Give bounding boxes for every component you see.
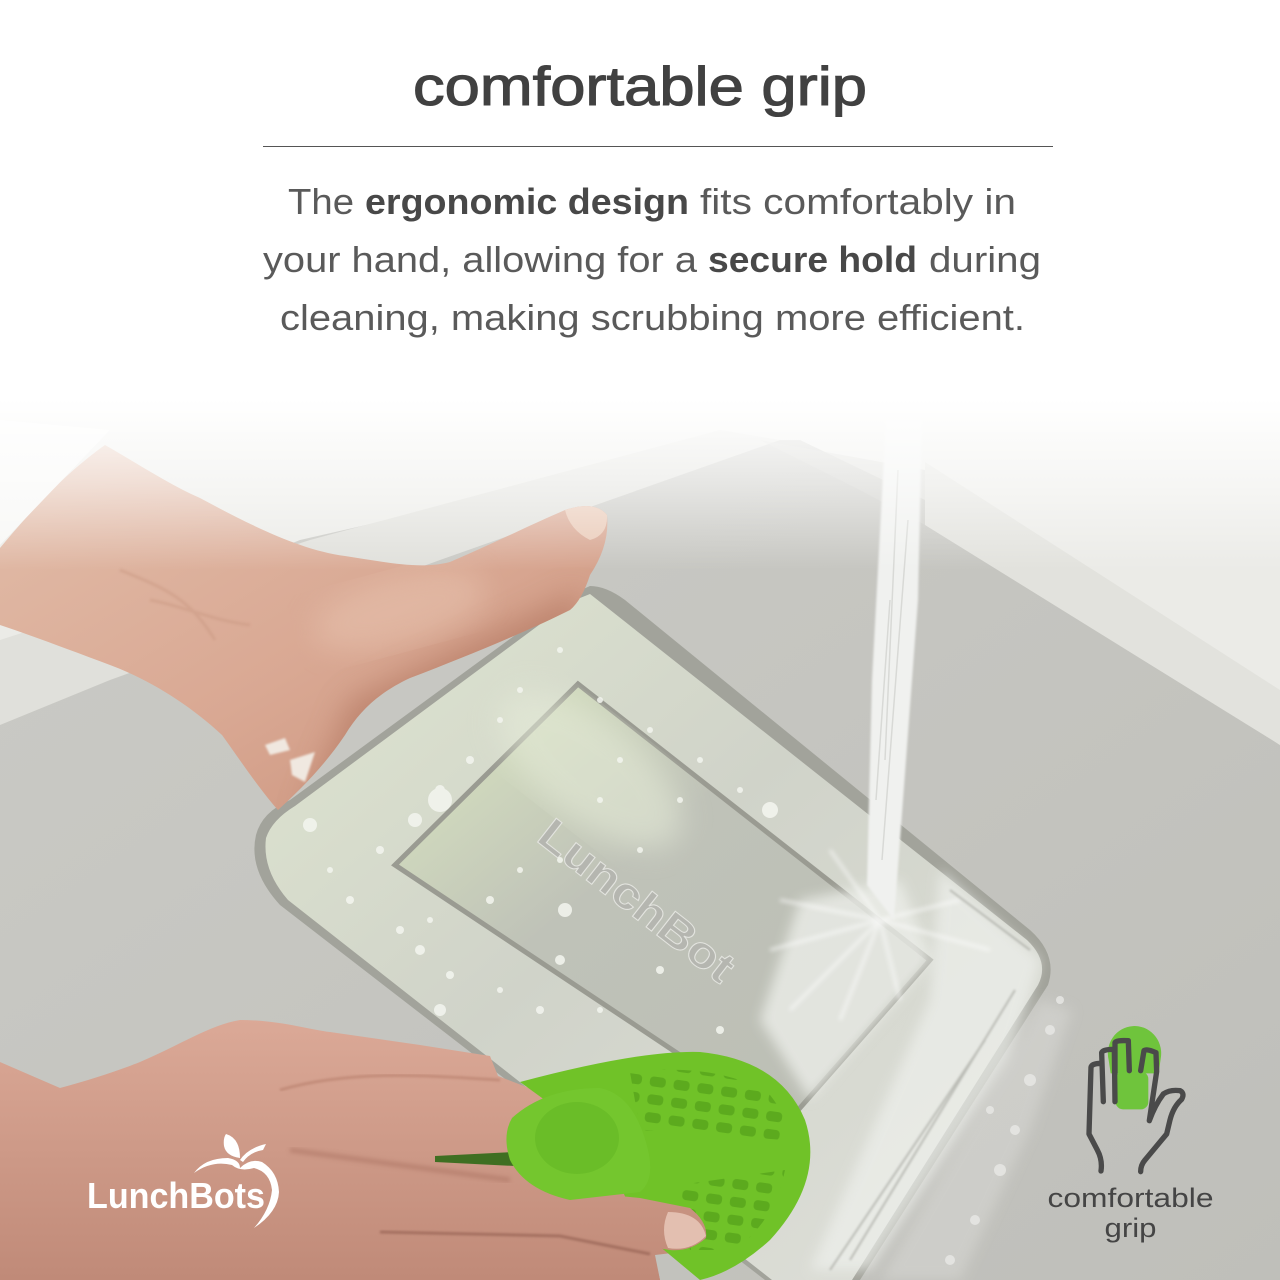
top white fade xyxy=(0,0,1280,570)
description text: secure hold xyxy=(708,239,917,280)
LunchBots logo xyxy=(87,1134,279,1228)
running water stream xyxy=(867,420,922,920)
countertop edges xyxy=(0,380,1280,745)
logo apple outline xyxy=(194,1158,279,1228)
panel reflection xyxy=(473,663,707,877)
lunchbox xyxy=(254,586,1051,1280)
description text: fits comfortably in xyxy=(700,181,1016,222)
title: comfortable grip xyxy=(413,55,867,117)
finger loop xyxy=(506,1088,650,1200)
shadow under thumb xyxy=(308,591,580,780)
description text: The xyxy=(288,181,354,222)
scrubber texture xyxy=(630,1070,786,1140)
photo: hands washing a lunchbox under running water xyxy=(0,440,1280,1280)
splash at water impact xyxy=(760,850,1072,1280)
finger gap xyxy=(380,1232,650,1254)
finger over the pad xyxy=(380,1172,706,1250)
description text: cleaning, making scrubbing more efficient. xyxy=(280,297,1025,338)
logo wordmark: LunchBots xyxy=(87,1175,265,1216)
ring finger xyxy=(350,1238,660,1280)
description text: your hand, allowing for a xyxy=(263,239,698,280)
upper hand xyxy=(0,445,607,820)
rim streaks xyxy=(830,890,1030,1270)
icon: hand with green grip xyxy=(1089,1026,1183,1172)
veins xyxy=(120,570,250,640)
embossed brand on the lid: LunchBot xyxy=(529,809,744,993)
badge label: comfortable xyxy=(1048,1183,1214,1213)
scrubber strip xyxy=(435,1152,515,1166)
palm highlight xyxy=(324,574,480,649)
comfortable grip badge xyxy=(1048,1026,1214,1243)
fingernail xyxy=(664,1212,706,1249)
spray droplets beyond rim xyxy=(945,996,1064,1265)
description text: ergonomic design xyxy=(365,181,689,222)
lunchbox recessed panel xyxy=(395,684,930,1125)
knuckle shadows xyxy=(280,1076,500,1090)
thumbnail xyxy=(565,506,607,540)
sink basin xyxy=(0,380,1280,1280)
foam on palm xyxy=(265,738,315,782)
comfortable grip badge: grip xyxy=(1104,1213,1156,1243)
loop hollow xyxy=(535,1102,619,1174)
description text: during xyxy=(929,239,1041,280)
green scrubber xyxy=(350,1052,810,1280)
lower hand xyxy=(0,1020,706,1280)
divider xyxy=(263,146,1053,147)
logo leaf xyxy=(224,1134,266,1162)
shirt cuff xyxy=(0,420,110,545)
scrubber pad xyxy=(520,1052,810,1280)
water droplets xyxy=(303,647,778,1034)
description text xyxy=(263,181,1041,338)
